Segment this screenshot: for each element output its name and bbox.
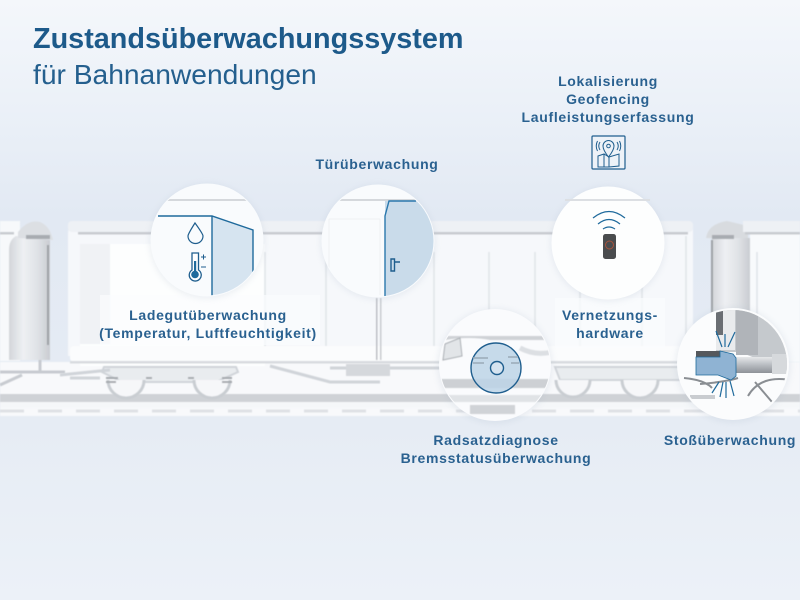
icon: thermometer <box>189 253 206 281</box>
label: networking hardware: Vernetzungs- <box>562 307 658 323</box>
icon: map with location pin <box>592 136 625 169</box>
main wagon <box>68 221 693 366</box>
label: cargo monitoring: Ladegutüberwachung <box>129 307 287 323</box>
train illustration <box>0 135 800 422</box>
label: wheelset diagnosis <box>401 432 591 466</box>
label: networking hardware: hardware <box>576 325 644 341</box>
label: door monitoring: Türüberwachung <box>315 156 439 172</box>
label: cargo monitoring <box>99 307 317 341</box>
icon: wheel highlight <box>471 343 521 393</box>
circle: door monitoring <box>320 184 436 300</box>
label: shock monitoring: Stoßüberwachung <box>664 432 796 448</box>
track <box>0 362 800 416</box>
circle: networking hardware <box>550 186 666 302</box>
label: location services: Laufleistungserfassung <box>522 109 694 125</box>
icon: sensor device <box>603 234 616 259</box>
icon: wireless waves <box>593 212 625 229</box>
right wagon <box>706 221 800 362</box>
label: wheelset diagnosis: Radsatzdiagnose <box>433 432 559 448</box>
label: networking hardware <box>562 307 658 341</box>
title line 2: für Bahnanwendungen <box>33 58 317 90</box>
bogies and wheels <box>60 364 690 398</box>
circle: cargo monitoring <box>149 183 265 300</box>
label: location services: Geofencing <box>566 91 650 107</box>
white halo behind labels <box>100 295 665 348</box>
title <box>33 23 463 90</box>
icon: door handle <box>391 259 400 271</box>
circle: wheelset diagnosis <box>437 308 553 424</box>
left wagon end <box>0 221 65 385</box>
icon: water drop <box>188 223 203 244</box>
title line 1: Zustandsüberwachungssystem <box>33 23 463 55</box>
icon: buffer highlight <box>696 331 736 398</box>
label: location services <box>522 73 694 125</box>
label: wheelset diagnosis: Bremsstatusüberwachung <box>401 450 591 466</box>
circle: shock monitoring <box>675 305 792 423</box>
label: location services: Lokalisierung <box>558 73 658 89</box>
label: cargo monitoring: (Temperatur, Luftfeuchtigkeit) <box>99 325 317 341</box>
